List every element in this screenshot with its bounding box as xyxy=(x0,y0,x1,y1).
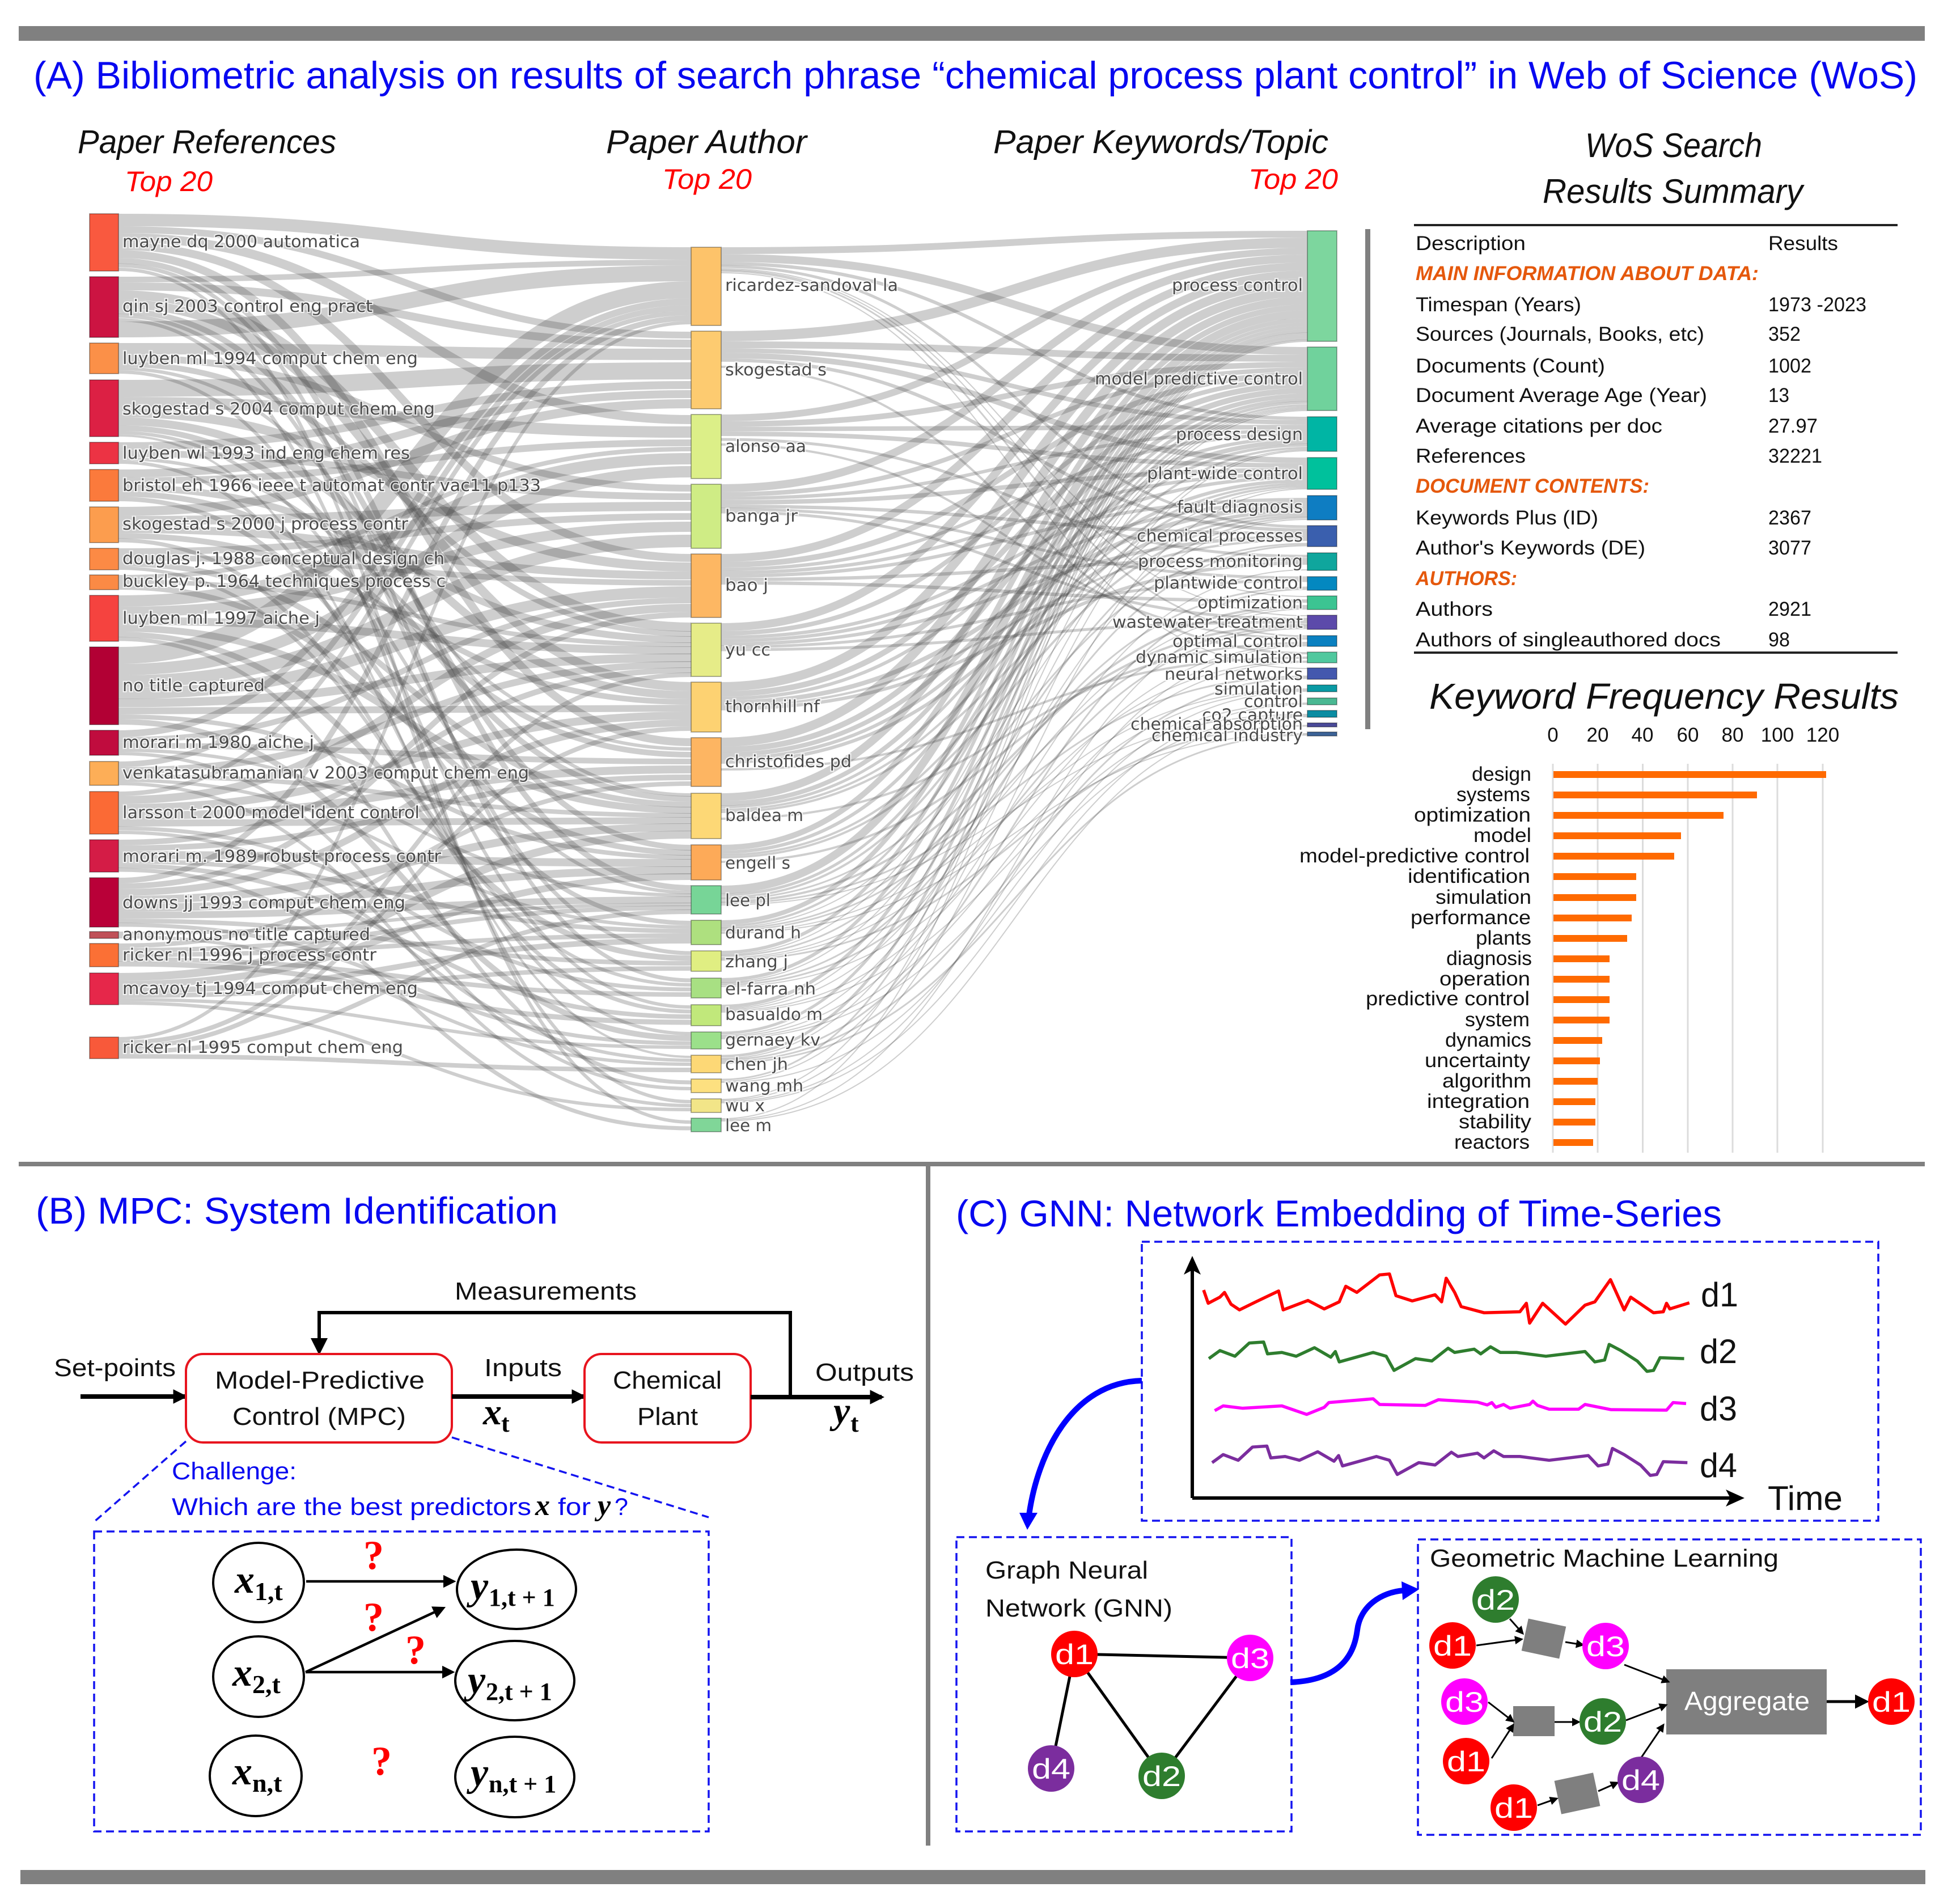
labels: keywords: optimal control xyxy=(1172,632,1303,651)
arrow: outputs y_t: y xyxy=(829,1390,850,1432)
labels: references: buckley p. 1964 techniques process c xyxy=(122,572,446,591)
labels: keywords: fault diagnosis xyxy=(1177,497,1303,517)
table title: Results Summary xyxy=(1543,172,1805,210)
labels: authors: alonso aa xyxy=(725,437,806,456)
box: chemical plant: Plant xyxy=(637,1403,698,1431)
time-series box: Time xyxy=(1768,1479,1843,1517)
arrow: set-points: Set-points xyxy=(54,1354,176,1382)
arrow: inputs x_t: x xyxy=(482,1391,502,1433)
nodes: references xyxy=(90,214,118,1059)
challenge text: Which are the best predictors xyxy=(172,1493,531,1521)
table: WoS search results summary: 1973 -2023 xyxy=(1768,294,1866,316)
box: aggregate: Aggregate xyxy=(1684,1686,1810,1716)
panel C: GNN network embedding xyxy=(956,1192,1921,1835)
arrow: outputs y_t: t xyxy=(850,1410,859,1437)
bar chart: keyword frequency: reactors xyxy=(1454,1131,1530,1153)
box: chemical plant xyxy=(585,1354,751,1442)
heading: paper author: Paper Author xyxy=(606,124,808,160)
geometric machine learning box: d1 xyxy=(1494,1792,1533,1824)
labels: references: morari m. 1989 robust process contr xyxy=(122,847,441,866)
labels: authors: chen jh xyxy=(725,1055,788,1074)
bar chart: keyword frequency: 80 xyxy=(1722,724,1743,746)
bar chart: keyword frequency: 40 xyxy=(1632,724,1653,746)
bar chart: keyword frequency: plants xyxy=(1476,927,1531,949)
bar chart: keyword frequency: uncertainty xyxy=(1425,1050,1531,1072)
table: WoS search results summary: 1002 xyxy=(1768,355,1811,377)
table: WoS search results summary: References xyxy=(1416,445,1526,467)
table: WoS search results summary: 13 xyxy=(1768,384,1789,407)
dashed box: predictors: 1,t xyxy=(255,1577,283,1606)
table: WoS search results summary: Authors xyxy=(1416,598,1493,620)
title: panel A: (A) Bibliometric analysis on results of search phrase “chemical process plant control” in Web of Science (WoS) xyxy=(33,54,1917,97)
geometric machine learning box: d2 xyxy=(1476,1584,1515,1616)
labels: references: douglas j. 1988 conceptual design ch xyxy=(122,549,444,568)
labels: references: skogestad s 2000 j process contr xyxy=(122,514,408,534)
feedback arrow: measurements xyxy=(319,1277,790,1397)
box: model-predictive control xyxy=(186,1354,452,1442)
labels: authors: ricardez-sandoval la xyxy=(725,276,898,295)
bar chart: keyword frequency: optimization xyxy=(1414,804,1531,826)
challenge text: ? xyxy=(615,1493,628,1521)
bar chart: keyword frequency: algorithm xyxy=(1442,1070,1531,1092)
bar chart: keyword frequency: simulation xyxy=(1436,886,1531,908)
geometric machine learning box: Geometric Machine Learning xyxy=(1430,1545,1779,1572)
box: chemical plant: Chemical xyxy=(613,1366,722,1394)
GNN box: Network (GNN) xyxy=(985,1594,1172,1622)
dashed box: predictors: ? xyxy=(371,1738,392,1784)
labels: authors: christofides pd xyxy=(725,752,852,771)
chart title: Keyword Frequency Results xyxy=(1429,676,1899,717)
table title xyxy=(1543,126,1805,210)
table: WoS search results summary: Results xyxy=(1768,232,1838,255)
labels: references: ricker nl 1995 comput chem eng xyxy=(122,1038,403,1057)
labels: keywords: chemical industry xyxy=(1151,726,1303,745)
table: WoS search results summary: 32221 xyxy=(1768,445,1822,467)
bar chart: keyword frequency: systems xyxy=(1456,784,1530,806)
GNN box: Graph Neural xyxy=(985,1556,1148,1584)
labels: keywords: neural networks xyxy=(1165,665,1303,684)
table: WoS search results summary: DOCUMENT CONTENTS: xyxy=(1416,475,1649,497)
bar chart: keyword frequency: diagnosis xyxy=(1446,947,1532,970)
labels: keywords: optimization xyxy=(1197,593,1303,612)
table: WoS search results summary: Author's Keywords (DE) xyxy=(1416,537,1645,559)
dashed box: predictors: x xyxy=(232,1651,252,1695)
labels: references: luyben ml 1994 comput chem eng xyxy=(122,349,418,368)
bar chart: keyword frequency: 100 xyxy=(1761,724,1794,746)
dashed box: predictors: n,t xyxy=(252,1768,282,1797)
dashed box: predictors: ? xyxy=(363,1533,384,1578)
dashed box: predictors: y xyxy=(464,1658,486,1702)
dashed box: predictors: y xyxy=(467,1564,489,1608)
heading: paper keywords xyxy=(993,124,1338,195)
table: WoS search results summary xyxy=(1414,126,1898,654)
labels: references: venkatasubramanian v 2003 comput chem eng xyxy=(122,763,529,782)
labels: references: no title captured xyxy=(122,676,265,695)
table: WoS search results summary: Keywords Plus (ID) xyxy=(1416,507,1598,529)
labels: references: luyben wl 1993 ind eng chem res xyxy=(122,443,410,463)
labels: references: anonymous no title captured xyxy=(122,925,370,944)
labels: keywords: wastewater treatment xyxy=(1112,612,1303,632)
bar chart: keyword frequency: dynamics xyxy=(1445,1029,1531,1051)
bar chart: keyword frequency: identification xyxy=(1408,865,1530,887)
labels: references: downs jj 1993 comput chem eng xyxy=(122,893,405,912)
heading: paper author xyxy=(606,124,808,195)
box: aggregate xyxy=(1666,1669,1827,1734)
labels: keywords xyxy=(1095,276,1303,745)
labels: keywords: chemical processes xyxy=(1137,526,1303,545)
table: WoS search results summary: 3077 xyxy=(1768,537,1811,559)
flows: references to authors xyxy=(118,220,691,1128)
arrow: outputs y_t xyxy=(751,1359,914,1437)
GNN box: d1 xyxy=(1055,1639,1094,1670)
labels: keywords: chemical absorption xyxy=(1130,714,1303,734)
bar chart: keyword frequency: design xyxy=(1472,763,1531,785)
labels: authors: yu cc xyxy=(725,640,770,659)
nodes: keywords xyxy=(1307,231,1337,736)
geometric machine learning box: d4 xyxy=(1621,1765,1660,1796)
geometric machine learning box: d1 xyxy=(1447,1746,1485,1778)
dashed box: predictors: 2,t + 1 xyxy=(486,1678,552,1706)
heading: paper references: Top 20 xyxy=(125,166,213,197)
labels: authors: el-farra nh xyxy=(725,979,816,998)
vertical divider in panel A xyxy=(1365,229,1370,729)
bar chart: keyword frequency: stability xyxy=(1459,1111,1532,1133)
time-series box: d2 xyxy=(1700,1332,1737,1370)
labels: references xyxy=(122,232,541,1057)
labels: authors: wu x xyxy=(725,1096,765,1115)
labels: keywords: simulation xyxy=(1214,679,1303,699)
table: WoS search results summary: 98 xyxy=(1768,629,1790,651)
labels: authors: banga jr xyxy=(725,506,798,526)
table: WoS search results summary: Average citations per doc xyxy=(1416,415,1662,437)
labels: authors: wang mh xyxy=(725,1076,803,1095)
time-series box: d4 xyxy=(1700,1446,1737,1484)
labels: references: morari m 1980 aiche j xyxy=(122,733,314,752)
labels: authors: lee pl xyxy=(725,891,770,910)
labels: keywords: co2 capture xyxy=(1202,705,1303,725)
labels: references: skogestad s 2004 comput chem eng xyxy=(122,399,435,418)
curved arrow: GNN to geometric learning xyxy=(1290,1581,1419,1682)
arrow: outputs y_t: Outputs xyxy=(815,1359,914,1386)
box: model-predictive control: Control (MPC) xyxy=(232,1403,406,1431)
labels: references: bristol eh 1966 ieee t automat contr vac11 p133 xyxy=(122,476,541,495)
labels: keywords: process control xyxy=(1172,276,1303,295)
curved arrow: series to GNN xyxy=(1019,1381,1142,1530)
labels: keywords: dynamic simulation xyxy=(1136,648,1303,667)
bar chart: keyword frequency: 0 xyxy=(1547,724,1559,746)
bottom border bar xyxy=(20,1870,1925,1884)
geometric machine learning box: d3 xyxy=(1586,1631,1625,1662)
bar chart: keyword frequency: operation xyxy=(1439,968,1530,990)
labels: keywords: process design xyxy=(1176,425,1303,444)
table: WoS search results summary: 27.97 xyxy=(1768,415,1818,437)
heading: paper author: Top 20 xyxy=(662,163,752,195)
bar chart: keyword frequency: 60 xyxy=(1677,724,1699,746)
GNN box: d3 xyxy=(1231,1643,1269,1674)
flows: authors to keywords xyxy=(721,234,1307,1121)
table: WoS search results summary: Sources (Journals, Books, etc) xyxy=(1416,323,1704,345)
geometric machine learning box: d1 xyxy=(1872,1686,1911,1718)
time-series box: d3 xyxy=(1700,1390,1737,1428)
table: WoS search results summary: Description xyxy=(1416,232,1526,255)
panel C title: (C) GNN: Network Embedding of Time-Series xyxy=(956,1192,1722,1234)
panel B: MPC system identification xyxy=(36,1190,914,1831)
challenge text: Challenge: xyxy=(172,1458,297,1485)
geometric machine learning box: d3 xyxy=(1445,1686,1484,1718)
geometric machine learning box: d1 xyxy=(1433,1630,1472,1662)
table: WoS search results summary: 2921 xyxy=(1768,598,1811,620)
labels: references: luyben ml 1997 aiche j xyxy=(122,608,320,628)
table: WoS search results summary: 2367 xyxy=(1768,507,1811,529)
labels: authors: baldea m xyxy=(725,806,803,825)
labels: authors: durand h xyxy=(725,923,801,942)
heading: paper references xyxy=(78,124,336,197)
labels: keywords: process monitoring xyxy=(1138,552,1303,571)
challenge text: for xyxy=(558,1493,591,1521)
dashed box: predictors xyxy=(94,1531,709,1831)
time-series box xyxy=(1142,1242,1878,1521)
heading: paper references: Paper References xyxy=(78,124,336,160)
dashed box: predictors: x xyxy=(232,1750,252,1793)
heading: paper keywords: Paper Keywords/Topic xyxy=(993,124,1328,160)
geometric machine learning box: d2 xyxy=(1583,1706,1622,1738)
heading: paper keywords: Top 20 xyxy=(1248,163,1338,195)
panel B title: (B) MPC: System Identification xyxy=(36,1190,558,1232)
table: WoS search results summary: 352 xyxy=(1768,323,1801,345)
bar chart: keyword frequency xyxy=(1299,676,1899,1153)
challenge text: y xyxy=(594,1490,611,1522)
labels: authors: skogestad s xyxy=(725,360,827,379)
arrow: inputs x_t: Inputs xyxy=(484,1354,562,1382)
bar chart: keyword frequency: system xyxy=(1465,1009,1530,1031)
arrow: inputs x_t xyxy=(452,1354,583,1437)
time-series box: d1 xyxy=(1701,1276,1738,1314)
labels: authors: gernaey kv xyxy=(725,1030,820,1050)
table: WoS search results summary: Timespan (Years) xyxy=(1416,294,1581,316)
labels: references: mcavoy tj 1994 comput chem eng xyxy=(122,979,418,998)
table: WoS search results summary: Documents (Count) xyxy=(1416,355,1605,377)
labels: references: qin sj 2003 control eng pract xyxy=(122,297,372,316)
bar chart: keyword frequency: 120 xyxy=(1806,724,1839,746)
dashed box: predictors: ? xyxy=(405,1627,426,1673)
dashed box: predictors: ? xyxy=(363,1594,384,1640)
bar chart: keyword frequency: predictive control xyxy=(1366,988,1530,1010)
bar chart: keyword frequency: model-predictive control xyxy=(1299,845,1530,867)
table: WoS search results summary: Authors of singleauthored docs xyxy=(1416,629,1721,651)
feedback arrow: measurements: Measurements xyxy=(455,1277,637,1305)
bar chart: keyword frequency: 20 xyxy=(1587,724,1608,746)
section divider xyxy=(19,1162,1925,1166)
dashed box: predictors: x xyxy=(234,1558,255,1602)
GNN box: d2 xyxy=(1142,1761,1181,1792)
arrow: inputs x_t: t xyxy=(501,1410,510,1437)
GNN box: d4 xyxy=(1032,1753,1070,1785)
dashed box: predictors: 1,t + 1 xyxy=(489,1584,555,1611)
dashed zoom lines xyxy=(94,1437,709,1522)
bar chart: keyword frequency: performance xyxy=(1411,907,1531,929)
labels: authors xyxy=(725,276,898,1135)
geometric machine learning box xyxy=(1418,1539,1921,1835)
labels: keywords: plant-wide control xyxy=(1147,464,1303,483)
labels: keywords: model predictive control xyxy=(1095,369,1303,388)
challenge text xyxy=(172,1458,628,1522)
box: model-predictive control: Model-Predictive xyxy=(215,1366,425,1394)
GNN box xyxy=(956,1537,1292,1831)
top border bar xyxy=(19,26,1925,41)
challenge text: x xyxy=(535,1490,550,1522)
bar chart: keyword frequency: model xyxy=(1473,824,1531,847)
sankey chart xyxy=(90,214,1337,1135)
labels: authors: bao j xyxy=(725,576,768,595)
labels: references: ricker nl 1996 j process contr xyxy=(122,945,376,964)
labels: authors: engell s xyxy=(725,853,790,873)
labels: keywords: plantwide control xyxy=(1154,573,1303,593)
labels: keywords: control xyxy=(1244,692,1303,711)
labels: authors: basualdo m xyxy=(725,1005,823,1024)
labels: authors: thornhill nf xyxy=(725,697,820,716)
labels: references: mayne dq 2000 automatica xyxy=(122,232,360,251)
labels: authors: zhang j xyxy=(725,952,788,971)
dashed box: predictors: y xyxy=(467,1751,489,1795)
labels: references: larsson t 2000 model ident control xyxy=(122,803,420,822)
table: WoS search results summary: Document Average Age (Year) xyxy=(1416,384,1707,407)
table: WoS search results summary: MAIN INFORMATION ABOUT DATA: xyxy=(1416,263,1759,285)
dashed box: predictors: 2,t xyxy=(252,1670,281,1699)
labels: authors: lee m xyxy=(725,1116,772,1135)
table: WoS search results summary: AUTHORS: xyxy=(1415,568,1517,590)
table title: WoS Search xyxy=(1585,126,1762,164)
nodes: authors xyxy=(691,247,721,1132)
dashed box: predictors: n,t + 1 xyxy=(489,1770,556,1798)
bar chart: keyword frequency: integration xyxy=(1427,1090,1530,1112)
